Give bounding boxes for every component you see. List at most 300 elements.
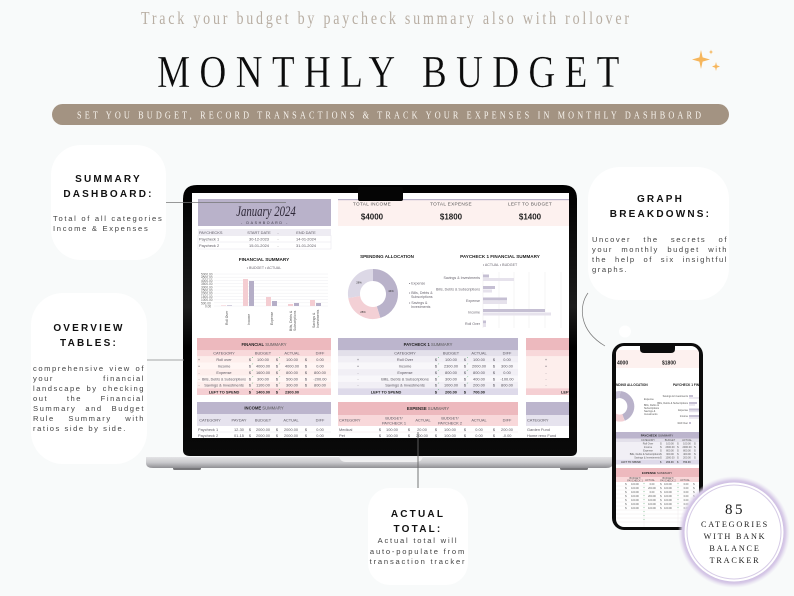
callout: graph breakdowns (588, 167, 729, 300)
table: expense summary: BUDGET/ (385, 416, 404, 420)
table: income summary: ACTUAL (283, 418, 300, 422)
table: paycheck 1 summary: 400.00 (473, 376, 486, 381)
dashboard heading: - DASHBOARD - (241, 221, 289, 225)
phone paycheck table: $ (677, 461, 679, 464)
phone (608, 343, 703, 530)
table: paycheck 1 summary: + (357, 364, 360, 368)
phone bars: Bills, Debts & Subscriptions (657, 402, 689, 405)
leader line: overview tables (147, 359, 184, 361)
phone expense table: 0.00 (684, 483, 689, 486)
phone expense table: $ (660, 491, 662, 494)
table: financial summary: Bills, Debts & Subscriptions (202, 377, 246, 381)
bar chart: financial summary: Bills, Debts & (289, 310, 293, 331)
phone expense table: 100.00 (631, 495, 639, 498)
phone expense table: 100.00 (631, 491, 639, 494)
table: financial summary: 500.00 (286, 376, 299, 381)
table: financial summary: $ (249, 364, 252, 368)
bar chart: financial summary: 5000.00 (201, 272, 213, 276)
banner (52, 104, 729, 125)
donut chart: spending allocation: • Expense (409, 282, 425, 286)
table: income summary: PAYDAY (232, 418, 247, 422)
table: financial summary: - (198, 383, 200, 388)
bar chart: financial summary: 0.00 (205, 304, 211, 308)
bar chart: financial summary: Income (247, 314, 251, 325)
phone paycheck table: $ (694, 450, 696, 452)
table: expense summary: -0.00 (503, 433, 512, 438)
phone expense table (616, 468, 699, 527)
table: clipped right summary: + (545, 364, 548, 368)
table: financial summary: 300.00 (257, 376, 270, 381)
table: expense summary: ACTUAL (471, 418, 488, 422)
phone totals: 4000 (617, 360, 628, 366)
table: paycheck 1 summary: 0.00 (503, 370, 512, 375)
phone donut: Expense (644, 398, 654, 401)
table: financial summary: Income (218, 364, 230, 368)
table: income summary: $ (305, 433, 308, 438)
phone paycheck table: ACTUAL (682, 439, 693, 442)
table: paycheck 1 summary: Bills, Debts & Subscriptions (381, 376, 429, 381)
phone paycheck table: Roll Over (643, 442, 653, 446)
callout heading: ACTUAL (391, 509, 445, 520)
bar chart: financial summary: 3500.00 (201, 282, 213, 286)
phone paycheck table: CATEGORY (641, 439, 655, 442)
totals panel: $4000 (361, 212, 384, 222)
paycheck dates table: 15-01-2024 (249, 243, 270, 248)
phone paycheck table: $ (694, 453, 696, 456)
table: financial summary: 0.00 (316, 364, 325, 368)
table: expense summary: $ (464, 427, 467, 432)
phone expense table: ACTUAL (645, 479, 656, 482)
bar chart: paycheck 1 summary (436, 254, 561, 328)
phone expense table: $ (693, 487, 695, 490)
table: paycheck 1 summary: $ (464, 357, 467, 362)
phone expense table: 100.00 (664, 491, 672, 494)
phone expense table: PAYCHECK 1 (627, 480, 643, 482)
badge: 85 categories: BALANCE (709, 544, 761, 553)
table: expense summary: $ (408, 433, 411, 438)
phone expense table: 100.00 (648, 507, 656, 510)
table: income summary: $ (249, 433, 252, 438)
table: paycheck 1 summary: $ (435, 389, 438, 394)
phone paycheck table: Expense (643, 450, 653, 452)
table: income summary: 01-15 (234, 433, 244, 438)
badge: 85 categories (678, 476, 790, 588)
bar chart: financial summary: Subscriptions (293, 310, 297, 331)
phone expense table: 100.00 (648, 499, 656, 502)
phone expense table: $ (693, 507, 695, 510)
phone bars: Expense (678, 409, 689, 412)
phone donut (608, 383, 702, 418)
phone paycheck table: $ (677, 457, 679, 460)
table: financial summary: $ (276, 364, 279, 368)
bar chart: financial summary: 3000.00 (201, 285, 213, 289)
table: financial summary: 4000.00 (285, 364, 300, 368)
phone expense table: $ (660, 487, 662, 490)
bar chart: paycheck 1 summary: • ACTUAL • BUDGET (483, 263, 518, 267)
phone expense table: $ (693, 483, 695, 486)
totals panel: $1400 (519, 212, 542, 222)
table: financial summary (197, 338, 331, 395)
table: paycheck 1 summary: $ (435, 383, 438, 388)
phone paycheck table: 1000.00 (665, 457, 675, 460)
table: paycheck 1 summary: 200.00 (445, 389, 457, 394)
table: financial summary: DIFF (316, 351, 325, 356)
phone paycheck table: 2000.00 (682, 446, 692, 449)
table: income summary: 0.00 (316, 427, 325, 432)
table: paycheck 1 summary: -100.00 (500, 376, 514, 381)
callout text: your monthly budget with (592, 245, 728, 254)
table: paycheck 1 summary: 700.00 (473, 389, 485, 394)
table: expense summary: $ (408, 427, 411, 432)
table: financial summary: BUDGET (255, 351, 272, 356)
callout heading: BREAKDOWNS: (610, 208, 711, 220)
bar chart: financial summary: 2000.00 (201, 292, 213, 296)
table: clipped right summary (526, 338, 571, 395)
paycheck dates table: 31-01-2024 (296, 243, 317, 248)
phone expense table: $ (625, 491, 627, 494)
phone expense table: $ (625, 507, 627, 510)
callout: actual total (368, 488, 468, 585)
table: expense summary: $ (493, 433, 496, 438)
phone paycheck table: 700.00 (683, 461, 691, 464)
leader line: summary dashboard (165, 202, 286, 204)
phone expense table: 0.00 (650, 491, 655, 494)
callout text: the help of six insightful (592, 255, 728, 264)
table: financial summary: $ (305, 357, 308, 362)
table: paycheck 1 summary: $ (435, 357, 438, 362)
paycheck dates table: Paycheck 2 (199, 243, 219, 248)
paycheck dates table: - (277, 243, 279, 248)
phone totals (616, 350, 699, 368)
phone paycheck table: $ (694, 457, 696, 460)
bar chart: paycheck 1 summary: PAYCHECK 1 FINANCIAL SUMMARY (460, 254, 540, 259)
phone screen (616, 350, 699, 527)
phone bars: Roll Over (678, 422, 688, 425)
table: paycheck 1 summary: 800.00 (445, 370, 458, 375)
laptop notch (358, 187, 403, 201)
phone expense table: 100.00 (631, 499, 639, 502)
phone paycheck table: $ (677, 446, 679, 449)
table: financial summary: $ (305, 370, 308, 375)
bar chart: paycheck 1 summary: Roll Over (465, 322, 481, 326)
table: income summary: 12-30 (234, 427, 245, 432)
table: paycheck 1 summary: 800.00 (473, 370, 486, 375)
table: expense summary: 0.00 (475, 427, 484, 432)
table: paycheck 1 summary: 800.00 (501, 383, 514, 388)
table: income summary: 2000.00 (284, 427, 299, 432)
table: expense summary (338, 402, 518, 438)
paycheck dates table: 14-01-2024 (296, 236, 317, 242)
table: financial summary: $ (249, 389, 252, 394)
table: income summary: CATEGORY (199, 418, 221, 422)
table: financial summary: $ (249, 383, 252, 388)
table: paycheck 1 summary: PAYCHECK 1 SUMMARY (404, 342, 453, 347)
table: expense summary: DIFF (503, 418, 512, 422)
table: paycheck 1 summary: - (357, 370, 359, 375)
table: financial summary: 800.00 (286, 370, 299, 375)
callout heading: TOTAL: (394, 524, 442, 534)
phone paycheck table: $ (660, 453, 662, 456)
paycheck dates table: Paycheck 1 (199, 236, 219, 242)
bar chart: financial summary: Expense (270, 312, 274, 325)
table: paycheck 1 summary: $ (464, 383, 467, 388)
table: financial summary: 1400.00 (256, 389, 270, 394)
phone expense table: 0.00 (684, 507, 689, 510)
table: expense summary: 20.00 (417, 427, 428, 432)
phone expense table: 100.00 (631, 503, 639, 506)
leader curve: graph breakdowns (582, 293, 605, 346)
table: paycheck 1 summary: $ (493, 376, 496, 381)
table: income summary: 2000.00 (284, 433, 299, 438)
table: expense summary: PAYCHECK 2 (438, 420, 462, 426)
callout text: Rule Summary with (33, 414, 145, 423)
table: financial summary: $ (305, 364, 308, 368)
bar chart: financial summary: 4000.00 (201, 279, 213, 283)
phone expense table: $ (625, 483, 627, 486)
table: paycheck 1 summary: 300.00 (501, 364, 514, 368)
phone paycheck table: 800.00 (683, 450, 691, 452)
phone expense table: BUDGET/ (662, 477, 674, 480)
table: expense summary: 100.00 (444, 427, 457, 432)
phone expense table: $ (660, 503, 662, 506)
phone expense table: 100.00 (664, 483, 672, 486)
table: paycheck 1 summary: 300.00 (445, 376, 458, 381)
table: financial summary: 100.00 (257, 357, 270, 362)
table: financial summary: Expense (216, 370, 232, 375)
table: expense summary: BUDGET/ (441, 416, 460, 420)
table: financial summary: 4000.00 (256, 364, 271, 368)
callout text: landscape by checking (33, 384, 145, 393)
table: financial summary: LEFT TO SPEND (209, 389, 240, 394)
phone paycheck table: LEFT TO SPEND (621, 461, 641, 464)
table: paycheck 1 summary: $ (464, 364, 467, 368)
table: income summary: 0.00 (316, 433, 325, 438)
phone donut: PAYCHECK 1 FINA (673, 383, 702, 387)
table: income summary (197, 402, 331, 438)
phone paycheck table: Bills, Debts & Subscriptions (630, 453, 661, 456)
phone expense table: BUDGET/ (629, 477, 641, 480)
bar chart: financial summary: Investments (316, 309, 320, 328)
phone expense table: 100.00 (664, 487, 672, 490)
callout text (592, 235, 728, 274)
phone paycheck table: Savings & Investments (634, 457, 660, 460)
table: expense summary: 100.00 (386, 427, 399, 432)
bar chart: financial summary: 2500.00 (201, 288, 213, 292)
callout text: your financial (33, 374, 145, 383)
table: clipped right summary: + (545, 357, 548, 362)
paycheck dates table: END DATE (296, 230, 316, 235)
callout text: Total of all categories (53, 214, 163, 223)
table: income summary: 2000.00 (256, 433, 271, 438)
table: paycheck 1 summary: - (357, 383, 359, 388)
table: paycheck 1 summary: Roll Over (397, 357, 414, 362)
paycheck dates table (198, 229, 331, 249)
table: paycheck 1 summary: $ (435, 376, 438, 381)
phone expense table: 0.00 (684, 495, 689, 498)
table: clipped right summary: LEFT (561, 389, 571, 394)
phone paycheck table: $ (677, 450, 679, 452)
callout heading (391, 509, 445, 534)
table: expense summary: ACTUAL (415, 418, 432, 422)
phone expense table: $ (693, 495, 695, 498)
phone paycheck table: 200.00 (683, 457, 691, 460)
phone expense table: 0.00 (684, 487, 689, 490)
phone expense table: $ (693, 491, 695, 494)
table: financial summary: $ (276, 370, 279, 375)
bar chart: financial summary: 1000.00 (201, 298, 213, 302)
laptop screen (197, 199, 571, 438)
callout text: Summary and Budget (33, 404, 145, 413)
totals panel (338, 199, 569, 226)
callout text: ratios side by side. (33, 424, 127, 433)
bar chart: financial summary (201, 257, 328, 331)
callout text (370, 536, 466, 566)
bar chart: paycheck 1 summary: Expense (466, 299, 480, 303)
table: financial summary: $ (249, 376, 252, 381)
phone totals: $1800 (662, 360, 676, 366)
table: financial summary: -200.00 (313, 376, 327, 381)
table: paycheck 1 summary: 1000.00 (444, 383, 459, 388)
table: paycheck 1 summary: $ (464, 370, 467, 375)
table: financial summary: $ (276, 376, 279, 381)
table: financial summary: ACTUAL (284, 351, 301, 356)
paycheck dates table: - (277, 236, 279, 242)
title: MONTHLY BUDGET (157, 47, 619, 97)
table: paycheck 1 summary: 0.00 (503, 357, 512, 362)
phone expense table: $ (660, 483, 662, 486)
table: financial summary: $ (276, 383, 279, 388)
table: paycheck 1 summary: Income (399, 364, 411, 368)
phone expense table: $ (693, 503, 695, 506)
table: paycheck 1 summary: $ (493, 383, 496, 388)
table: income summary: BUDGET (255, 418, 272, 422)
table: clipped right funds (526, 402, 569, 438)
callout text: Actual total will (378, 536, 458, 545)
bar chart: paycheck 1 summary: Bills, Debts & Subscriptions (436, 288, 480, 292)
phone expense table: $ (660, 507, 662, 510)
table: paycheck 1 summary: $ (493, 370, 496, 375)
bar chart: financial summary: 1500.00 (201, 295, 213, 299)
phone paycheck table: 100.00 (666, 442, 674, 446)
phone paycheck table: $ (677, 453, 679, 456)
phone paycheck table: 100.00 (683, 442, 691, 446)
subtitle: Track your budget by paycheck summary also with rollover (141, 10, 630, 28)
phone expense table: $ (660, 495, 662, 498)
phone paycheck table: $ (660, 446, 662, 449)
laptop (146, 185, 613, 470)
table: financial summary: $ (249, 357, 252, 362)
table: financial summary: + (198, 364, 201, 368)
callout text: Income & Expenses (53, 224, 149, 233)
phone paycheck table: 2300.00 (665, 446, 675, 449)
phone donut: Subscriptions (644, 407, 660, 410)
table: expense summary: 200.00 (501, 427, 514, 432)
table: paycheck 1 summary: Savings & Investments (385, 383, 425, 388)
table: expense summary: $ (464, 433, 467, 438)
phone paycheck table: $ (694, 446, 696, 449)
table: financial summary: $ (305, 383, 308, 388)
phone expense table: 0.00 (650, 483, 655, 486)
phone expense table: ACTUAL (680, 479, 691, 482)
bar chart: paycheck 1 summary: Income (468, 310, 480, 314)
table: paycheck 1 summary: + (357, 357, 360, 362)
phone expense table: $ (625, 495, 627, 498)
phone paycheck table: $ (660, 461, 662, 464)
bar chart: financial summary: FINANCIAL SUMMARY (239, 257, 290, 262)
donut chart: spending allocation: Subscriptions (411, 295, 433, 299)
phone donut: NDING ALLOCATION (616, 383, 648, 387)
callout text: Uncover the secrets of (592, 235, 728, 244)
table: paycheck 1 summary: CATEGORY (394, 351, 416, 356)
table: expense summary: PAYCHECK 1 (382, 420, 406, 426)
callout text: graphs. (592, 265, 628, 274)
badge: 85 categories: CATEGORIES (701, 520, 769, 529)
table: paycheck 1 summary: 2000.00 (472, 364, 487, 368)
table: expense summary: Pet (339, 433, 346, 438)
bar chart: paycheck 1 summary: Savings & Investments (443, 276, 480, 280)
table: clipped right summary: - (545, 376, 547, 381)
donut chart: spending allocation: SPENDING ALLOCATION (360, 254, 414, 259)
phone paycheck table: $ (677, 442, 679, 446)
callout text: comprehensive view of (33, 364, 145, 373)
phone expense table: 0.00 (684, 499, 689, 502)
callout heading (610, 194, 711, 220)
table: financial summary: 800.00 (314, 370, 327, 375)
phone paycheck table: $ (660, 450, 662, 452)
callout heading: DASHBOARD: (63, 188, 154, 200)
phone expense table: $ (660, 499, 662, 502)
bar chart: financial summary: Savings & (312, 312, 316, 328)
callout text: out the Financial (33, 394, 145, 403)
table: income summary: 2000.00 (256, 427, 271, 432)
table: paycheck 1 summary: 200.00 (473, 383, 486, 388)
paycheck dates table: START DATE (247, 230, 271, 235)
phone expense table: 100.00 (664, 503, 672, 506)
table: paycheck 1 summary: 100.00 (445, 357, 458, 362)
totals panel: TOTAL EXPENSE (430, 202, 472, 206)
paycheck dates table: PAYCHECKS (199, 230, 223, 235)
bar chart: financial summary: Roll Over (225, 310, 229, 325)
phone donut: Savings & (644, 410, 656, 413)
phone donut: Bills, Debts & (644, 404, 659, 407)
table: financial summary: 800.00 (314, 383, 327, 388)
table: income summary: Paycheck 1 (198, 427, 218, 432)
table: clipped right funds: Garden Fund (527, 427, 550, 432)
phone expense table: $ (625, 499, 627, 502)
table: income summary: INCOME SUMMARY (244, 406, 284, 410)
banner: SET YOU BUDGET, RECORD TRANSACTIONS & TRACK YOUR EXPENSES IN MONTHLY DASHBOARD (77, 110, 701, 122)
table: financial summary: $ (276, 357, 279, 362)
bar chart: financial summary: 4500.00 (201, 276, 213, 280)
table: financial summary: $ (305, 376, 308, 381)
phone expense table: 100.00 (631, 507, 639, 510)
laptop base (146, 456, 613, 470)
table: paycheck 1 summary: $ (435, 364, 438, 368)
phone bars: Income (680, 415, 689, 418)
phone expense table: 0.00 (684, 503, 689, 506)
phone expense table: $ (625, 487, 627, 490)
faint dot (619, 326, 631, 338)
phone paycheck table: 400.00 (683, 453, 691, 456)
table: financial summary: CATEGORY (213, 351, 235, 356)
phone expense table: $ (693, 499, 695, 502)
phone expense table: 100.00 (631, 483, 639, 486)
donut chart: spending allocation (354, 254, 433, 314)
phone paycheck table: PAYCHECK SUMMARY (641, 434, 673, 438)
icon: sparkles (692, 50, 720, 71)
bar chart: financial summary: 500.00 (201, 301, 211, 305)
badge: 85 categories: WITH BANK (704, 532, 766, 541)
